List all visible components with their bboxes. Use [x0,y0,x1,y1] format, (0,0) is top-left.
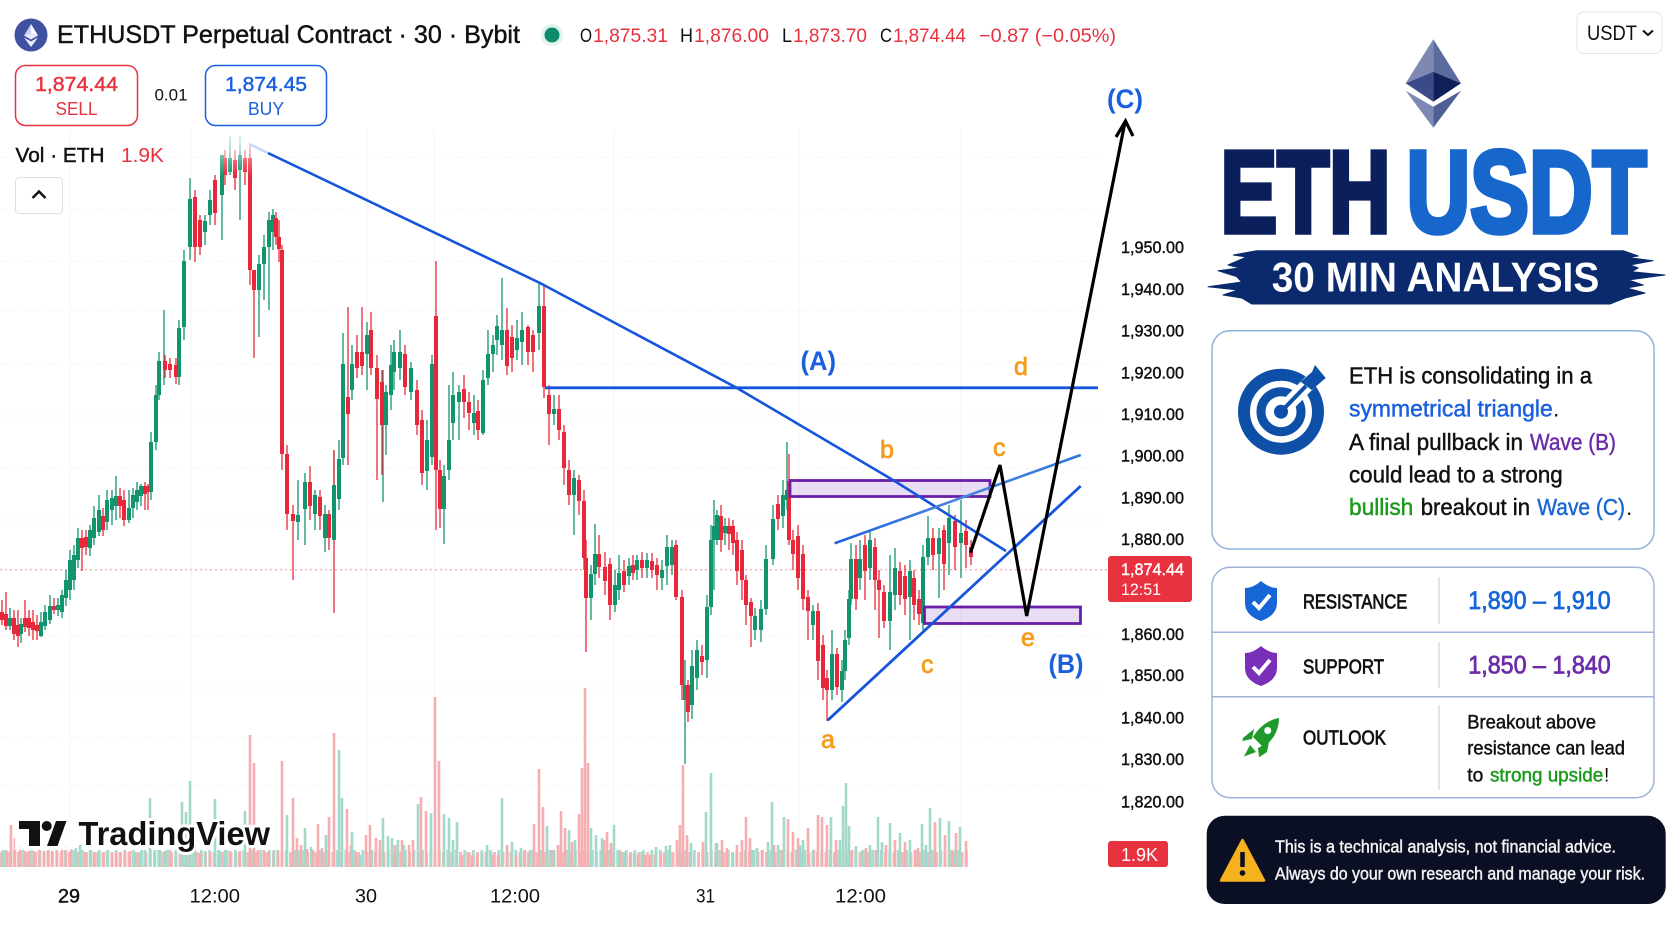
TradingView watermark [15,815,270,852]
wave labels: (B) [1048,649,1084,679]
price scale labels: 1,900.00 [1121,446,1184,466]
volume tag: 1.9K [1121,845,1158,865]
OHLC values: O [580,26,592,47]
banner: 30 min analysis [1208,251,1665,304]
volume legend: 1.9K [121,145,165,167]
time axis labels [58,886,886,908]
row: resistance [1245,581,1611,621]
wave labels: c [921,651,934,679]
buy button [206,66,326,126]
status dot [541,24,563,46]
outlook label: OUTLOOK [1303,727,1387,749]
OHLC values: H [680,26,693,47]
price scale labels: 1,830.00 [1121,750,1184,769]
OHLC values: 1,876.00 [694,26,769,47]
icon: ethereum logo [1406,39,1461,128]
currency selector: USDT [1587,22,1637,45]
support range: 1,850 – 1,840 [1468,652,1611,680]
TradingView wordmark: TradingView [78,815,270,852]
summary text: . [1553,396,1559,422]
summary text: . [1626,494,1632,520]
symbol title: ETHUSDT Perpetual Contract · 30 · Bybit [57,21,520,49]
price scale labels: 1,860.00 [1121,625,1184,644]
price scale labels: 1,890.00 [1121,488,1184,508]
wave labels: a [821,726,835,754]
icon: ethereum coin [14,18,48,52]
sell button: SELL [56,99,98,119]
price scale labels: 1,910.00 [1121,405,1184,424]
currency selector [1577,12,1662,54]
disclaimer text: Always do your own research and manage your risk. [1275,863,1645,883]
sell button: 1,874.44 [35,74,118,96]
title: ETH USDT: ETH [1220,127,1390,257]
projected price path arrow [970,121,1133,616]
OHLC values: 1,873.70 [793,26,867,47]
OHLC values: C [880,26,892,47]
icon: TradingView logo [19,821,66,846]
price scale labels: 1,820.00 [1121,792,1184,812]
panel: levels table [1212,567,1654,798]
OHLC values: −0.87 (−0.05%) [979,26,1116,47]
summary text: A final pullback in [1349,429,1523,455]
summary text [1349,362,1632,520]
icon: green rocket [1242,718,1279,757]
panel: disclaimer [1207,816,1666,904]
summary text: could lead to a strong [1349,462,1563,488]
price scale labels: 1,880.00 [1121,530,1184,549]
icon: target with arrow [1244,365,1326,449]
horizontal wave A line [545,386,1098,389]
resistance label: RESISTANCE [1303,591,1407,613]
volume legend [16,145,165,167]
disclaimer text: This is a technical analysis, not financial advice. [1275,837,1616,857]
sell button [16,66,138,126]
row: support [1245,646,1611,686]
time axis labels: 31 [696,886,715,908]
buy button: BUY [248,99,284,119]
time axis labels: 30 [355,886,377,908]
volume legend: Vol · ETH [16,145,104,167]
disclaimer text [1275,837,1645,883]
outlook text: strong upside [1490,766,1603,787]
time axis labels: 29 [58,886,80,908]
wave labels: e [1021,624,1035,652]
collapse button [16,178,62,214]
OHLC values [580,26,1116,47]
icon: purple shield [1245,646,1277,686]
summary text: ETH is consolidating in a [1349,362,1592,388]
wave labels [800,84,1143,754]
outlook text: resistance can lead [1467,738,1625,759]
wave labels: d [1014,353,1028,381]
support label: SUPPORT [1303,656,1384,678]
price scale labels: 1,840.00 [1121,708,1184,728]
price scale labels: 1,850.00 [1121,666,1184,685]
rising upper triangle line [835,455,1081,543]
outlook text [1467,712,1625,787]
rising lower triangle line [828,486,1081,720]
volume tag [1108,841,1168,867]
summary text: Wave (B) [1530,429,1616,455]
price scale labels: 1,940.00 [1121,280,1184,299]
wave labels: c [993,434,1006,462]
outlook text: Breakout above [1467,712,1596,733]
current price tag: 12:51 [1121,580,1161,599]
OHLC values: 1,875.31 [593,26,668,47]
row: outlook [1242,712,1625,787]
buy button: 1,874.45 [225,74,307,96]
current price dotted line [0,569,1108,571]
price scale labels: 1,920.00 [1121,364,1184,382]
wave labels: (A) [800,346,836,376]
price scale labels: 1,950.00 [1121,238,1184,257]
icon: warning triangle [1221,840,1264,880]
summary text: bullish [1349,494,1413,520]
volume bars [0,688,968,867]
title: ETH USDT [1220,127,1646,257]
summary text: symmetrical triangle [1349,396,1553,422]
time axis labels: 12:00 [835,886,886,908]
panel: summary [1212,331,1654,549]
outlook text: ! [1604,766,1609,787]
summary text: Wave (C) [1537,494,1625,520]
summary text: breakout in [1421,494,1530,520]
support zone box [924,607,1080,624]
resistance range: 1,890 – 1,910 [1468,587,1611,615]
current price tag [1108,556,1192,602]
price scale labels: 1,930.00 [1121,322,1184,340]
banner: 30 min analysis: 30 MIN ANALYSIS [1272,254,1599,301]
spread value: 0.01 [154,86,188,104]
OHLC values: L [782,26,792,47]
price scale labels [1121,238,1184,812]
current price tag: 1,874.44 [1121,560,1184,579]
wave labels: (C) [1107,84,1143,114]
candlestick chart [2,130,971,764]
wave labels: b [880,436,894,464]
resistance zone box [790,480,990,496]
icon: blue shield [1245,581,1277,621]
time axis labels: 12:00 [190,886,240,908]
chart header: symbol and OHLC [14,18,1116,52]
outlook text: to [1467,766,1483,787]
descending trendline [249,144,1006,551]
time axis labels: 12:00 [490,886,540,908]
OHLC values: 1,874.44 [893,26,966,47]
